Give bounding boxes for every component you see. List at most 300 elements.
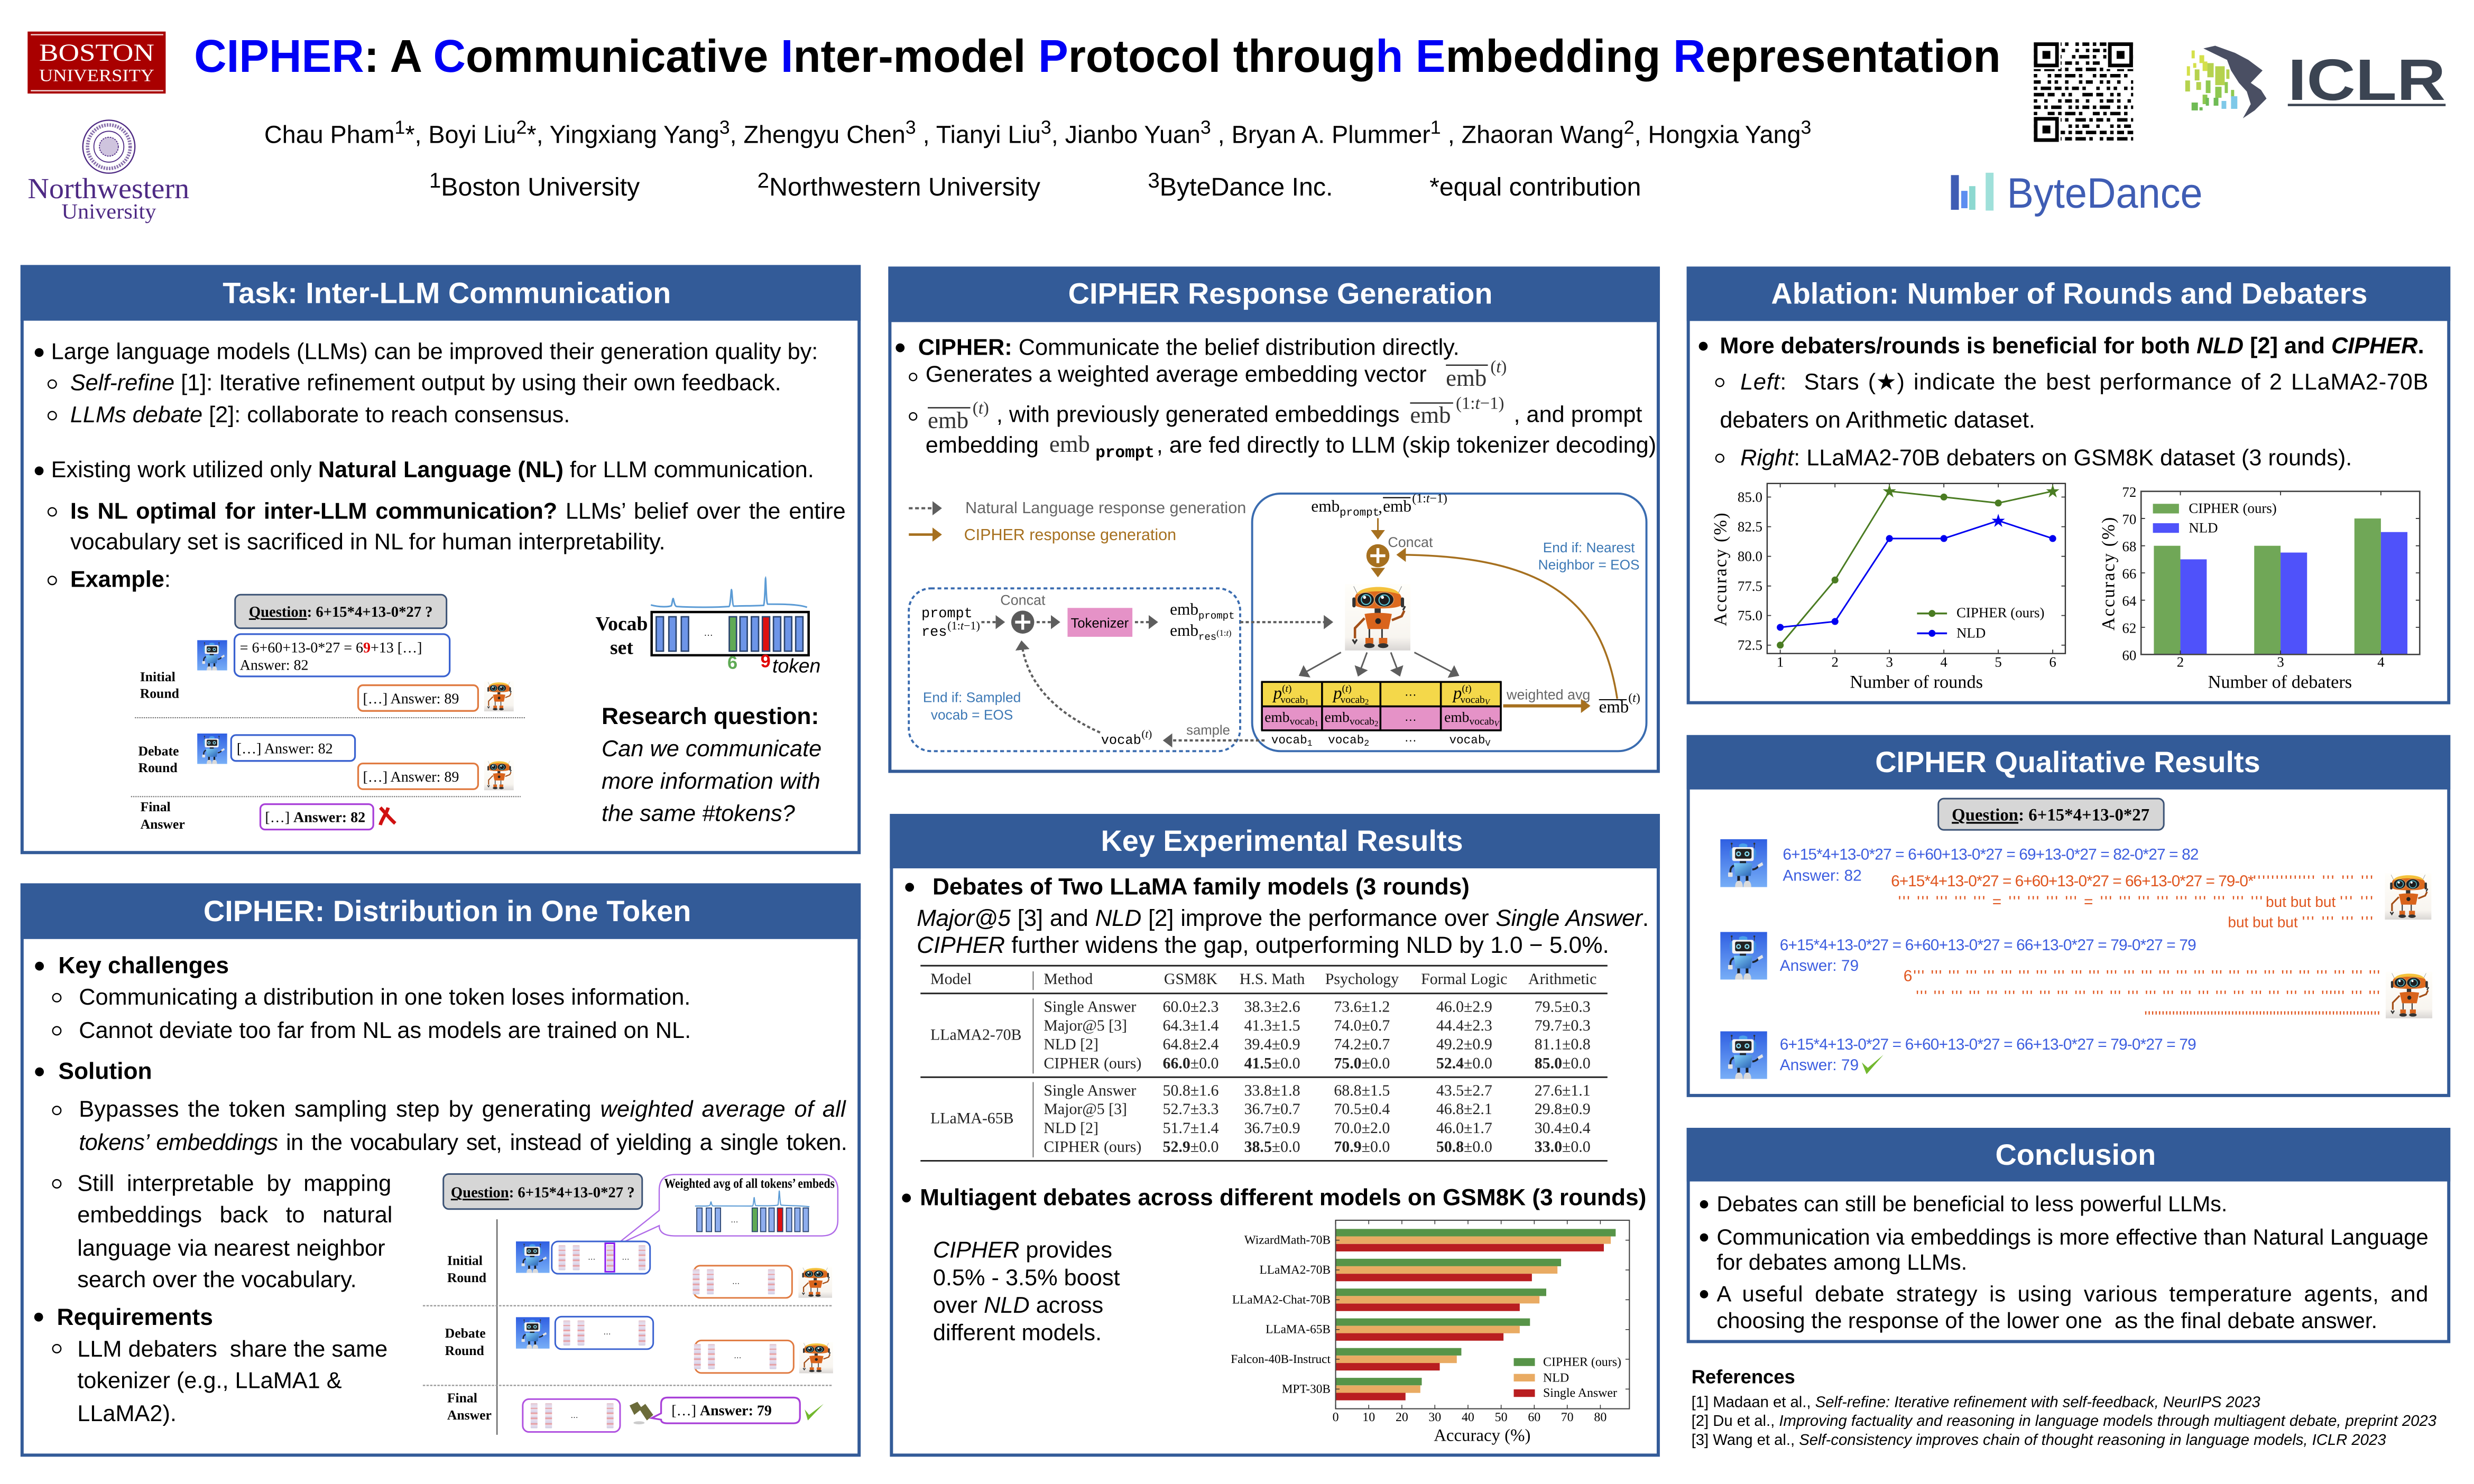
label: debate round: Debate [445,1325,486,1341]
icon: blue robot [1720,839,1767,887]
final answer bubble [652,1397,800,1423]
bar chart: number of debaters: 3 [2277,654,2285,670]
text block: response generation: (1:t−1) [1456,394,1505,413]
authors: 3 [1201,116,1212,138]
bar chart: number of debaters: 68 [2122,539,2137,554]
table: probabilities and embeddings: emb [1444,709,1469,725]
results table: 81.1±0.8 [1535,1037,1591,1054]
heading: Ablation: Number of Rounds and Debaters [1771,277,2367,310]
text block: conclusions: A useful debate strategy is using various temperature agents, and [1716,1281,2428,1306]
embedding bubble: blue, initial: … [622,1253,630,1263]
question box: Question: 6+15*4+13-0*27 ? [451,1185,635,1202]
table: probabilities and embeddings: p [1272,684,1283,703]
logo: Boston University [27,32,165,94]
text block: response generation: (t) [973,400,990,419]
embedding bubble: purple, final: … [570,1412,578,1421]
flow: natural language loop: res [1198,632,1217,643]
results table: 79.5±0.3 [1535,999,1591,1017]
heading: Conclusion [1996,1138,2156,1171]
flow: CIPHER loop: emb [1311,499,1340,516]
embedding bubble: blue, debate [555,1316,653,1349]
table: probabilities and embeddings: vocab [1460,695,1485,706]
end condition [1538,540,1640,572]
table: probabilities and embeddings: vocab [1340,695,1365,706]
message: orange round 1: ''' ''' ''' ''' [2302,915,2373,932]
response bubble: blue, initial [235,634,450,676]
legend [2153,500,2277,535]
callout: weighted average: Weighted avg of all tokens’ embeds [664,1175,836,1191]
line chart: number of rounds: 6 [2049,654,2057,670]
text block: conclusions: choosing the response of the lower one as the final debate answer. [1716,1307,2377,1333]
bar chart: models on GSM8K: MPT-30B [1282,1382,1331,1396]
table: probabilities and embeddings: … [1404,730,1417,745]
message: orange round 2: ''' ''' ''' ''' ''' ''' ''' ''' ''' ''' ''' ''' ''' ''' ''' ''' ''' ''' ''' ''' ''' ''' ''' '''''' ''' ''' [1916,989,2380,1006]
authors: , Bryan A. Plummer [1211,123,1430,150]
text block: solution: Bypasses the token sampling step by generating weighted average of all [79,1098,847,1123]
table: probabilities and embeddings: vocab [1271,735,1307,748]
question box [1938,799,2164,830]
results table: 60.0±2.3 [1163,999,1219,1017]
icon: orange robot [799,1342,833,1373]
logo: ICLR [2185,46,2445,118]
text block: solution [35,1060,847,1293]
authors: 3 [906,116,917,138]
results table: 49.2±0.9 [1436,1037,1492,1054]
affiliations: 2 [758,169,769,192]
results table: 74.2±0.7 [1334,1037,1390,1054]
text block: conclusions: for debates among LLMs. [1716,1249,1967,1275]
legend: Single Answer [1543,1386,1618,1400]
text block: solution: search over the vocabulary. [77,1268,357,1293]
bar chart: number of debaters: 70 [2122,512,2137,527]
bar chart: models on GSM8K: 60 [1528,1410,1540,1424]
results table: 50.8±0.0 [1436,1139,1492,1157]
results table: Arithmetic [1528,971,1598,989]
panel: Ablation [1687,266,2450,703]
label: vocab set [596,613,648,659]
results table: 46.0±1.7 [1436,1120,1492,1138]
results table: 52.7±3.3 [1163,1101,1219,1119]
table: probabilities and embeddings: (t) [1342,684,1352,695]
results table: 64.3±1.4 [1163,1018,1219,1035]
icon: blue robot [197,734,227,764]
bar chart: number of debaters [2100,484,2420,692]
weighted average arrow [1503,687,1641,717]
line chart: number of rounds: 80.0 [1738,549,1763,564]
response bubble: orange, initial [358,685,478,711]
text block: requirements: Requirements [57,1306,213,1331]
results table: 51.7±1.4 [1163,1120,1219,1138]
flow: CIPHER loop: (1:t−1) [1412,491,1448,506]
bar chart: models on GSM8K: 50 [1495,1410,1508,1424]
results table: 68.8±1.5 [1334,1083,1390,1100]
results table: Major@5 [3] [1044,1018,1127,1035]
response bubble: blue, debate [231,735,355,761]
message: blue round 2: 6+15*4+13-0*27 = 6+60+13-0*27 = 66+13-0*27 = 79-0*27 = 79 [1780,938,2197,955]
table: probabilities and embeddings: (t) [1462,684,1472,695]
message: blue final [1780,1037,2197,1075]
bar chart: models on GSM8K: WizardMath-70B [1244,1233,1331,1247]
results table: 41.3±1.5 [1244,1018,1300,1035]
research question: more information with [602,770,820,795]
icon: check [1862,1055,1884,1074]
label: initial round: Round [447,1269,487,1285]
tokenizer block: Tokenizer [1070,615,1129,631]
line chart: number of rounds: 72.5 [1738,637,1763,653]
text block: boost [933,1239,1120,1347]
label: final answer [447,1390,492,1423]
question box: Question: 6+15*4+13-0*27 ? [249,604,433,622]
authors: *, Boyi Liu [405,123,516,150]
legend: response generation [909,500,1246,545]
text block: existing work: vocabulary set is sacrificed in NL for human interpretability. [70,531,666,556]
bar chart: number of debaters: 72 [2122,484,2136,500]
logo: Boston University: UNIVERSITY [39,67,154,86]
line chart: number of rounds: 3 [1886,654,1894,670]
label: vocab set: set [610,637,634,659]
response bubble: orange, initial: […] Answer: 89 [363,692,459,708]
callout: weighted average [615,1174,838,1246]
table: probabilities and embeddings: … [1404,684,1417,699]
text block: boost: 0.5% - 3.5% boost [933,1266,1120,1292]
logo: ICLR: ICLR [2288,48,2445,113]
heading: CIPHER: Distribution in One Token [204,894,691,928]
QR code [2034,42,2133,142]
panel: CIPHER Distribution in One Token [21,883,861,1455]
title: CIPHER: A Communicative Inter-model Protocol through Embedding Representation [194,32,2001,83]
label: initial round: Initial [447,1253,484,1268]
results table: 38.3±2.6 [1244,999,1300,1017]
label: debate round [138,743,179,775]
heading: multiagent debates: Multiagent debates across different models on GSM8K (3 rounds) [920,1186,1646,1211]
logo: Northwestern University: Northwestern [27,174,189,206]
label: final answer [141,799,185,832]
results table: 43.5±2.7 [1436,1083,1492,1100]
text block: solution: tokens’ embeddings in the vocabulary set, instead of yielding a single token. [79,1131,847,1156]
table: probabilities and embeddings: V [1485,738,1491,749]
table: probabilities and embeddings: 1 [1305,698,1309,708]
message: orange round 1: but but but [2228,913,2298,931]
bar chart: number of debaters: 66 [2122,566,2137,581]
label: final answer: Answer [141,816,185,832]
table: probabilities and embeddings: emb [1325,709,1350,725]
message: blue final: Answer: 79 [1780,1058,1859,1075]
embedding bubble: purple, final [523,1399,620,1432]
results table: 36.7±0.9 [1244,1120,1300,1138]
bar chart: number of debaters: 4 [2377,654,2385,670]
bar chart: number of debaters: Accuracy (%) [2100,516,2119,630]
label: initial round [140,669,180,701]
flow: CIPHER loop: Concat [1388,534,1434,550]
token labels: token [772,655,820,678]
results table: 39.4±0.9 [1244,1037,1300,1054]
message: blue round 1 [1783,847,2200,886]
legend [1514,1355,1622,1400]
text block: key challenges: Key challenges [58,954,229,979]
icon: orange robot [2385,873,2431,920]
icon: binoculars [630,1402,653,1424]
results table: 79.7±0.3 [1535,1018,1591,1035]
results table: NLD [2] [1044,1120,1098,1138]
diagram: embedding debate [423,1174,838,1435]
text block: LLM intro: LLMs debate [2]: collaborate to reach consensus. [70,403,570,429]
line chart: number of rounds: 4 [1940,654,1948,670]
message: orange round 1: but but but [2266,893,2336,910]
logo: ByteDance: ByteDance [2007,170,2203,217]
results table: 27.6±1.1 [1535,1083,1591,1100]
results table: Formal Logic [1421,971,1508,989]
token distribution bars: … [704,629,713,639]
label: initial round [447,1253,487,1285]
message: orange round 1: 6+15*4+13-0*27 = 6+60+13-0*27 = 66+13-0*27 = 79-0* [1891,874,2254,891]
legend: CIPHER (ours) [1956,605,2044,620]
results table: 33.8±1.8 [1244,1083,1300,1100]
results table: H.S. Math [1240,971,1305,989]
message: orange round 1: ''' ''' ''' ''' ''' = ''' ''' ''' ''' = ''' ''' ''' ''' ''' ''' ''' ''' ''' [1898,894,2263,912]
results table: NLD [2] [1044,1037,1098,1054]
label: initial round: Initial [140,669,177,684]
line chart: number of rounds [1712,484,2065,693]
label: debate round: Debate [138,743,179,759]
message: blue round 2 [1780,938,2197,976]
label: vocab set: Vocab [596,613,648,635]
table: probabilities and embeddings: (t) [1282,684,1291,695]
message: orange round 1 [1891,874,2373,932]
table: probabilities and embeddings: p [1332,684,1343,703]
text block: response generation: CIPHER: Communicate the belief distribution directly. [918,336,1460,361]
label: debate round: Round [138,759,178,775]
heading: Task: Inter-LLM Communication [223,276,671,309]
results table: Method [1044,971,1093,989]
authors: , Zhengyu Chen [730,123,906,150]
icon: orange robot [798,1267,832,1298]
embedding bubble: blue, initial [552,1241,650,1274]
table: probabilities and embeddings: 1 [1307,738,1314,749]
text block: solution: Solution [58,1060,152,1085]
message: orange round 2 [1904,969,2380,1027]
text block: key challenges [35,954,691,1044]
text block: response generation: Generates a weighted average embedding vector [926,363,1427,388]
icon: check [805,1404,824,1421]
flow: natural language loop: (1:t) [1216,629,1232,639]
label: debate round [445,1325,486,1358]
authors: 1 [394,116,405,138]
text block: conclusions: Debates can still be beneficial to less powerful LLMs. [1716,1192,2227,1216]
flow: natural language loop: res [921,625,947,641]
embedding bubble: orange, debate [694,1340,793,1373]
heading: Key Experimental Results [1101,824,1463,857]
final answer bubble: […] Answer: 79 [671,1404,772,1420]
bar chart: models on GSM8K: 0 [1333,1410,1339,1424]
authors: 3 [1801,116,1812,138]
research question: the same #tokens? [602,802,797,827]
results table: 75.0±0.0 [1334,1056,1390,1073]
table: probabilities and embeddings: 2 [1365,698,1370,708]
bar chart: models on GSM8K: 80 [1594,1410,1607,1424]
text block: solution: language via nearest neighbor [77,1237,385,1262]
icon: orange robot [484,681,514,711]
authors: 2 [516,116,527,138]
logo: Northwestern University: University [61,200,156,223]
text block: existing work: Is NL optimal for inter-LLM communication? LLMs’ belief over the entire [70,500,846,525]
end condition: End if: Nearest [1543,540,1636,555]
text block: response generation: (t) [1490,358,1507,377]
bar chart: models on GSM8K: LLaMA2-Chat-70B [1232,1293,1331,1307]
authors: 3 [1041,116,1052,138]
bar chart: models on GSM8K [1231,1220,1629,1445]
affiliations: 1 [429,169,441,192]
panel: CIPHER Qualitative Results [1687,735,2450,1096]
text block: ablation: debaters on Arithmetic dataset. [1720,409,2035,434]
response bubble: blue, initial: Answer: 82 [240,658,309,674]
authors: , Tianyi Liu [916,123,1041,150]
results table: CIPHER (ours) [1044,1139,1141,1157]
heading: CIPHER Qualitative Results [1875,745,2260,778]
bar chart: models on GSM8K: LLaMA-65B [1266,1322,1331,1337]
line chart: number of rounds: 2 [1831,654,1839,670]
text block: key challenges: Cannot deviate too far from NL as models are trained on NL. [79,1019,691,1044]
text block: debates of two models: Major@5 [3] and NLD [2] improve the performance over Single Answer. [917,907,1649,932]
bar chart: models on GSM8K: 30 [1428,1410,1441,1424]
text block: response generation: emb [1410,404,1451,429]
text block: response generation: embedding [926,434,1039,459]
results table: 36.7±0.7 [1244,1101,1300,1119]
affiliations [429,169,1641,202]
results table: 66.0±0.0 [1163,1056,1219,1073]
text block: boost: different models. [933,1321,1102,1347]
legend: CIPHER (ours) [2189,500,2277,516]
icon: blue robot [1720,1031,1767,1079]
text block: requirements: LLaMA2). [77,1402,177,1427]
question box: Question: 6+15*4+13-0*27 [1952,806,2150,825]
results table: 30.4±0.4 [1535,1120,1591,1138]
flow: natural language loop: vocab [1101,732,1141,748]
results table: 70.0±2.0 [1334,1120,1390,1138]
flow: CIPHER loop: prompt [1340,507,1379,520]
references: [2] Du et al., Improving factuality and reasoning in language models through multiagent debate, preprint 2023 [1692,1413,2438,1431]
icon: blue robot [197,640,227,670]
diagram: debate example [131,578,821,832]
weighted average arrow: weighted avg [1505,687,1590,702]
label: initial round: Round [140,685,180,701]
text block: debates of two models: Debates of Two LLaMA family models (3 rounds) [933,876,1470,901]
end condition: End if: Sampled [923,690,1021,706]
logo: Boston University: BOSTON [39,40,154,67]
text block: response generation [896,336,1656,463]
text block: ablation: Left: Stars (★) indicate the best performance of 2 LLaMA2-70B [1740,370,2428,396]
logo: Northwestern University [27,120,189,223]
text block: ablation: Right: LLaMA2-70B debaters on GSM8K dataset (3 rounds). [1740,447,2352,471]
end condition: vocab = EOS [931,707,1013,722]
response bubble: blue, debate: […] Answer: 82 [237,743,333,758]
text block: existing work: Example: [70,568,171,593]
table: probabilities and embeddings: V [1494,720,1500,729]
text block: response generation: emb [928,409,968,434]
legend: NLD [1956,625,1987,641]
text block: response generation: , with previously generated embeddings [996,403,1399,428]
authors: *, Yingxiang Yang [527,123,719,150]
table: probabilities and embeddings: emb [1264,709,1289,725]
research question [602,705,821,827]
icon: blue robot [516,1317,550,1349]
end condition: Neighbor = EOS [1538,557,1640,572]
weighted average arrow: (t) [1628,691,1641,705]
text block: ablation: More debaters/rounds is beneficial for both NLD [2] and CIPHER. [1720,335,2424,360]
text block: response generation: , and prompt [1514,403,1642,428]
text block: LLM intro: Self-refine [1]: Iterative refinement output by using their own feedback. [70,372,781,397]
token labels: 9 [761,653,771,672]
line chart: number of rounds: Number of rounds [1850,674,1984,693]
results table: 74.0±0.7 [1334,1018,1390,1035]
panel: Conclusion [1687,1128,2450,1341]
bar chart: models on GSM8K: 40 [1462,1410,1474,1424]
table: probabilities and embeddings: vocab [1350,717,1379,729]
affiliations: *equal contribution [1429,173,1641,202]
results table: 46.8±2.1 [1436,1101,1492,1119]
affiliations: ByteDance Inc. [1160,173,1333,202]
text block: response generation: emb [1446,367,1487,392]
label: debate round: Round [445,1342,484,1358]
bar chart: number of debaters: Number of debaters [2208,673,2353,692]
authors: 2 [1624,116,1635,138]
table: probabilities and embeddings: vocab [1449,735,1485,748]
affiliations: Boston University [441,173,641,202]
results table: 70.9±0.0 [1334,1139,1390,1157]
panel: Key Experimental Results [890,814,1660,1455]
legend: response generation: CIPHER response generation [964,527,1176,545]
authors: Chau Pham [264,123,395,150]
text block: response generation: , are fed directly to LLM (skip tokenizer decoding) [1157,434,1656,459]
research question: Can we communicate [602,737,821,763]
bar chart: number of debaters: 2 [2177,654,2184,670]
table: probabilities and embeddings: p [1452,684,1463,703]
icon: orange robot [484,760,514,790]
response bubble: orange, debate: […] Answer: 89 [363,771,459,786]
embedding bubble: blue, initial: … [588,1253,596,1263]
results table: Single Answer [1044,1083,1137,1100]
icon: red cross [380,808,395,825]
text block: ablation [1699,335,2428,471]
text block: debates of two models [905,876,1649,959]
line chart: number of rounds: Accuracy (%) [1712,512,1731,626]
line chart: number of rounds: 5 [1995,654,2002,670]
message: blue final: 6+15*4+13-0*27 = 6+60+13-0*27 = 66+13-0*27 = 79-0*27 = 79 [1780,1037,2197,1054]
bar chart: models on GSM8K: Falcon-40B-Instruct [1231,1352,1332,1366]
references [1692,1366,2438,1450]
references: References [1692,1366,1795,1388]
results table: GSM8K [1164,971,1218,989]
embedding bubble: orange, debate: … [734,1352,742,1361]
bar chart: number of debaters: 62 [2122,620,2136,636]
icon: blue robot [1720,932,1767,979]
text block: requirements: LLM debaters share the same [77,1338,387,1363]
references: [1] Madaan et al., Self-refine: Iterative refinement with self-feedback, NeurIPS 2023 [1692,1394,2261,1412]
bar chart: models on GSM8K: 70 [1561,1410,1574,1424]
icon: orange robot [1345,584,1410,651]
response bubble: blue, initial: = 6+60+13-0*27 = 69+13 […] [240,642,422,657]
results table: CIPHER (ours) [1044,1056,1141,1073]
line chart: number of rounds: 82.5 [1738,519,1763,535]
icon: blue robot [516,1241,550,1273]
results table: 44.4±2.3 [1436,1018,1492,1035]
authors: 3 [719,116,731,138]
flow: natural language loop [909,588,1332,751]
heading: CIPHER Response Generation [1068,277,1492,310]
text block: existing work: Existing work utilized only Natural Language (NL) for LLM communication. [51,458,814,484]
results table: 38.5±0.0 [1244,1139,1300,1157]
flow: natural language loop: prompt [921,606,973,622]
token labels: 6 [727,655,737,673]
